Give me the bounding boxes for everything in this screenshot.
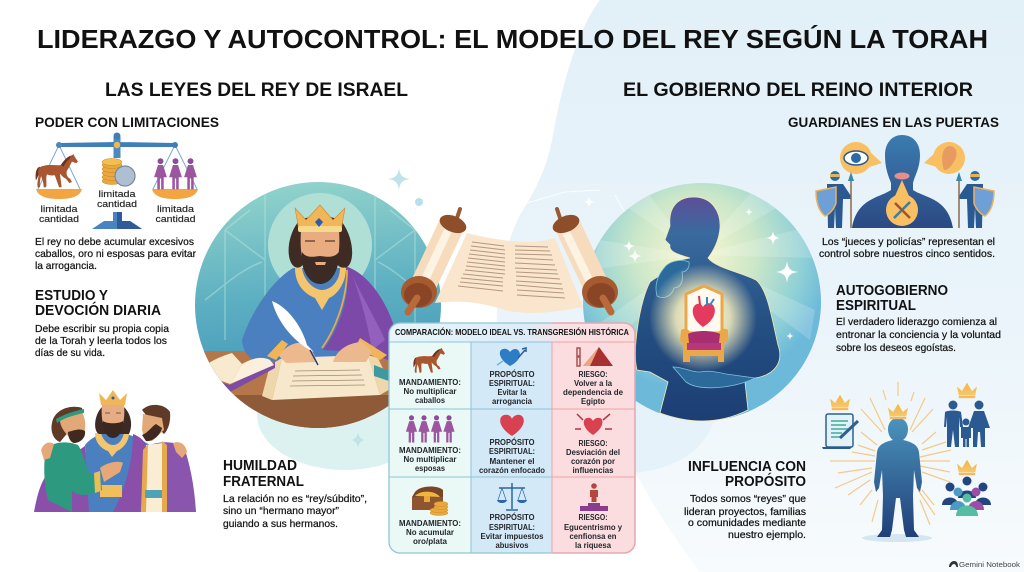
collar: [295, 268, 346, 310]
heading: [688, 459, 806, 490]
body text: [35, 236, 196, 272]
circle backdrop: [583, 183, 821, 421]
body text: o comunidades mediante: [688, 517, 806, 529]
panel: poder con limitaciones: [35, 115, 219, 272]
cell: riesgo desviacion: influencias: [572, 466, 614, 475]
illustration: king with two brothers: [34, 390, 196, 512]
crown: family: [957, 383, 977, 398]
heading: [223, 458, 304, 490]
icon: document and pen: [822, 414, 858, 449]
left man mantle: [34, 446, 89, 512]
eyes: [305, 240, 335, 242]
cell: proposito impuestos: [480, 483, 544, 550]
heading: [836, 283, 948, 314]
decorative sparkles and constellation: [351, 168, 632, 448]
label: right pan: limitada: [157, 204, 195, 215]
background: blue haze beside table: [560, 400, 720, 473]
cell: proposito impuestos: abusivos: [496, 541, 529, 550]
cell: proposito arrogancia: [489, 348, 535, 406]
cell: proposito corazon: ESPIRITUAL:: [489, 447, 535, 456]
illustration: leader with influence: [822, 382, 991, 542]
cell: mandamiento esposas: No multiplicar: [404, 455, 456, 464]
icon: silver coin: [115, 166, 135, 186]
cell: proposito corazon: [479, 415, 545, 475]
body text: Debe escribir su propia copia: [35, 323, 169, 335]
heading: right column: EL GOBIERNO DEL REINO INTERIOR: [623, 80, 973, 101]
robe: blue tunic: [242, 268, 372, 362]
cell: riesgo egipto: [563, 347, 624, 406]
left man head: [51, 407, 85, 443]
sparkles: [623, 208, 798, 340]
cell: mandamiento oro: [399, 486, 461, 546]
cell: riesgo egocentrismo: la riquesa: [575, 541, 612, 550]
body text: [836, 316, 1001, 354]
cell: mandamiento esposas: MANDAMIENTO:: [399, 446, 461, 455]
bust: [852, 135, 953, 228]
background: right pale blue wave: [497, 0, 1024, 572]
robe: purple mantle: [323, 266, 393, 360]
body text: lideran proyectos, familias: [684, 506, 806, 518]
cell: riesgo egocentrismo: Egucentrismo y: [564, 523, 623, 532]
circle backdrop: [195, 182, 441, 428]
closed green book: [374, 365, 388, 381]
face: [300, 232, 340, 257]
body text: la arrogancia.: [35, 260, 97, 272]
icon: horse: [36, 154, 78, 187]
beard: [302, 252, 339, 284]
icon: chain and pyramid: [577, 347, 613, 366]
eye bubble: [840, 142, 882, 174]
desk: [204, 351, 388, 428]
cell: proposito impuestos: Evitar impuestos: [480, 532, 544, 541]
cell: riesgo egipto: dependencia de: [563, 388, 624, 397]
right guard: [956, 171, 994, 228]
label: centre: cantidad: [97, 199, 137, 210]
lower hand: [673, 367, 755, 388]
icon: notebook mark: [949, 561, 958, 567]
window tracery: [205, 195, 430, 340]
cell: mandamiento caballos: MANDAMIENTO:: [399, 378, 461, 387]
icon: anatomical heart: [693, 296, 715, 327]
body text: control sobre nuestros cinco sentidos.: [819, 248, 995, 260]
cell: proposito corazon: Mantener el: [490, 457, 534, 466]
right man tunic: [141, 443, 166, 512]
cell: proposito arrogancia: PROPÓSITO: [490, 370, 534, 379]
centre purple mantle: [113, 434, 148, 512]
heading: PROPÓSITO: [725, 472, 806, 490]
chain bubble: [886, 180, 918, 226]
heading: [35, 288, 161, 319]
hands: [41, 442, 187, 482]
open book: [222, 362, 275, 392]
icon: family: [944, 400, 990, 447]
cell: mandamiento esposas: esposas: [415, 464, 446, 473]
silhouette: [635, 197, 780, 421]
collar: [95, 433, 129, 457]
shadow: [862, 534, 932, 542]
mouth: [894, 172, 910, 180]
icon: balance scale: [36, 132, 198, 229]
cell: proposito arrogancia: ESPIRITUAL:: [489, 379, 535, 388]
raised hand: [656, 260, 689, 298]
panel: autogobierno espiritual: [836, 283, 1001, 354]
cell: proposito corazon: corazón enfocado: [479, 466, 545, 475]
comparison table: [389, 323, 635, 553]
cell: riesgo egipto: Volver a la: [574, 379, 613, 388]
body text: Todos somos “reyes” que: [690, 493, 806, 505]
body text: Los “jueces y policías” representan el: [822, 236, 995, 248]
icon: blue heart with arrow: [497, 348, 526, 366]
crown: leader: [888, 404, 908, 419]
crown: [295, 205, 345, 231]
icon: heart with arrows: [575, 414, 612, 435]
label: centre: [97, 189, 137, 210]
body text: [35, 323, 169, 359]
table border: [389, 323, 635, 553]
cell: mandamiento oro: MANDAMIENTO:: [399, 519, 461, 528]
cell: proposito impuestos: ESPIRITUAL:: [489, 523, 535, 532]
title: LIDERAZGO Y AUTOCONTROL: EL MODELO DEL REY SEGÚN LA TORAH: [37, 24, 988, 54]
hair: [289, 216, 352, 268]
cell: proposito arrogancia: arrogancia: [492, 397, 533, 406]
icon: gold coins: [102, 158, 122, 184]
cell: proposito arrogancia: Evitar la: [498, 388, 527, 397]
body text: [684, 493, 806, 541]
heading: PODER CON LIMITACIONES: [35, 115, 219, 130]
illustration: inner throne figure: [583, 183, 821, 421]
body text: sino un “hermano mayor”: [223, 505, 339, 517]
leader figure: [874, 418, 922, 537]
illustration: king writing: [190, 182, 450, 431]
crown: community: [957, 460, 977, 475]
cell: mandamiento oro: oro/plata: [413, 537, 448, 546]
cell: riesgo desviacion: Desviación del: [566, 448, 620, 457]
body text: nuestro ejemplo.: [728, 529, 806, 541]
hands: [279, 343, 316, 363]
right roller: [550, 209, 618, 312]
heading: left column: LAS LEYES DEL REY DE ISRAEL: [105, 80, 408, 101]
body text: [223, 493, 367, 530]
text lines: [458, 242, 565, 298]
throne: [680, 286, 728, 362]
heading: FRATERNAL: [223, 474, 304, 490]
ear bubble: [924, 142, 965, 174]
label: left pan: cantidad: [39, 214, 79, 225]
icon: horse: [413, 348, 445, 373]
cell: proposito impuestos: PROPÓSITO: [490, 513, 534, 522]
cell: riesgo egocentrismo: cenfionsa en: [570, 532, 617, 541]
watermark: Gemini Notebook: [959, 560, 1020, 569]
crown: document: [830, 395, 850, 410]
cell: mandamiento caballos: caballos: [415, 396, 446, 405]
table heading: COMPARACIÓN: MODELO IDEAL VS. TRANSGRESIÓN HISTÓRICA: [395, 326, 629, 337]
cell: riesgo egipto: Egipto: [581, 397, 605, 406]
right man head: [142, 405, 170, 441]
cell: mandamiento esposas: [399, 415, 461, 473]
heading: GUARDIANES EN LAS PUERTAS: [788, 115, 999, 130]
cell: mandamiento caballos: [399, 348, 461, 405]
light rays: [596, 194, 815, 340]
heading: HUMILDAD: [223, 458, 297, 474]
label: right pan: cantidad: [156, 214, 196, 225]
icon: four women: [406, 415, 455, 442]
body text: de la Torah y leerla todos los: [35, 335, 167, 347]
left roller: [401, 209, 469, 312]
cell: mandamiento oro: No acumular: [406, 528, 454, 537]
icon: community: [942, 476, 991, 516]
heading: ESTUDIO Y: [35, 288, 108, 304]
icon: treasure chest: [412, 486, 448, 516]
panel: humildad fraternal: [223, 458, 367, 530]
label: right pan: [156, 204, 196, 225]
body text: sobre los deseos egoístas.: [836, 342, 956, 354]
panel: guardianes en las puertas: [788, 115, 999, 260]
heading: ESPIRITUAL: [836, 298, 916, 314]
body text: entronar la conciencia y la voluntad: [836, 329, 1001, 341]
cell: riesgo egocentrismo: RIESGO:: [578, 513, 608, 522]
cell: riesgo desviacion: corazón por: [571, 457, 615, 466]
body text: El verdadero liderazgo comienza al: [836, 316, 997, 328]
centre king head: [95, 390, 131, 438]
heading: DEVOCIÓN DIARIA: [35, 301, 161, 319]
label: left pan: limitada: [40, 204, 78, 215]
label: centre: limitada: [98, 189, 136, 200]
heading: INFLUENCIA CON: [688, 459, 806, 475]
background: central teal blob: [257, 360, 433, 470]
centre gold sash: [100, 485, 122, 497]
parchment: [435, 233, 583, 313]
cell: riesgo desviacion: RIESGO:: [578, 439, 608, 448]
quill: [272, 301, 314, 352]
left man green tunic: [44, 442, 102, 512]
cell: riesgo egocentrismo: [564, 483, 623, 550]
icon: red heart: [500, 415, 524, 436]
cell backgrounds: [389, 323, 635, 553]
cell: riesgo desviacion: [566, 414, 620, 475]
body text: [819, 236, 995, 260]
icon: three women: [154, 158, 197, 189]
cuffs: [267, 340, 288, 360]
body text: La relación no es “rey/súbdito”,: [223, 493, 367, 505]
panel: influencia con proposito: [684, 459, 806, 541]
left guard: [816, 171, 854, 228]
body text: El rey no debe acumular excesivos: [35, 236, 194, 248]
body text: caballos, oro ni esposas para evitar: [35, 248, 196, 260]
label: left pan: [39, 204, 79, 225]
halo: [268, 193, 372, 278]
body text: guiando a sus hermanos.: [223, 518, 338, 530]
right man robe: [140, 442, 196, 512]
body text: días de su vida.: [35, 347, 105, 359]
icon: bust with senses: [816, 135, 994, 228]
centre king robe: [85, 432, 150, 512]
illustration: Torah scroll: [401, 209, 618, 313]
icon: person on podium: [580, 483, 608, 511]
cell: mandamiento caballos: No multiplicar: [404, 387, 456, 396]
panel: estudio y devocion: [35, 288, 169, 359]
icon: scales: [497, 483, 527, 510]
glow: [649, 264, 757, 372]
rays: [830, 382, 951, 525]
cell: riesgo egipto: RIESGO:: [578, 370, 608, 379]
cell: proposito corazon: PROPÓSITO: [490, 438, 534, 447]
heading: AUTOGOBIERNO: [836, 283, 948, 299]
scroll on desk: [272, 355, 380, 400]
